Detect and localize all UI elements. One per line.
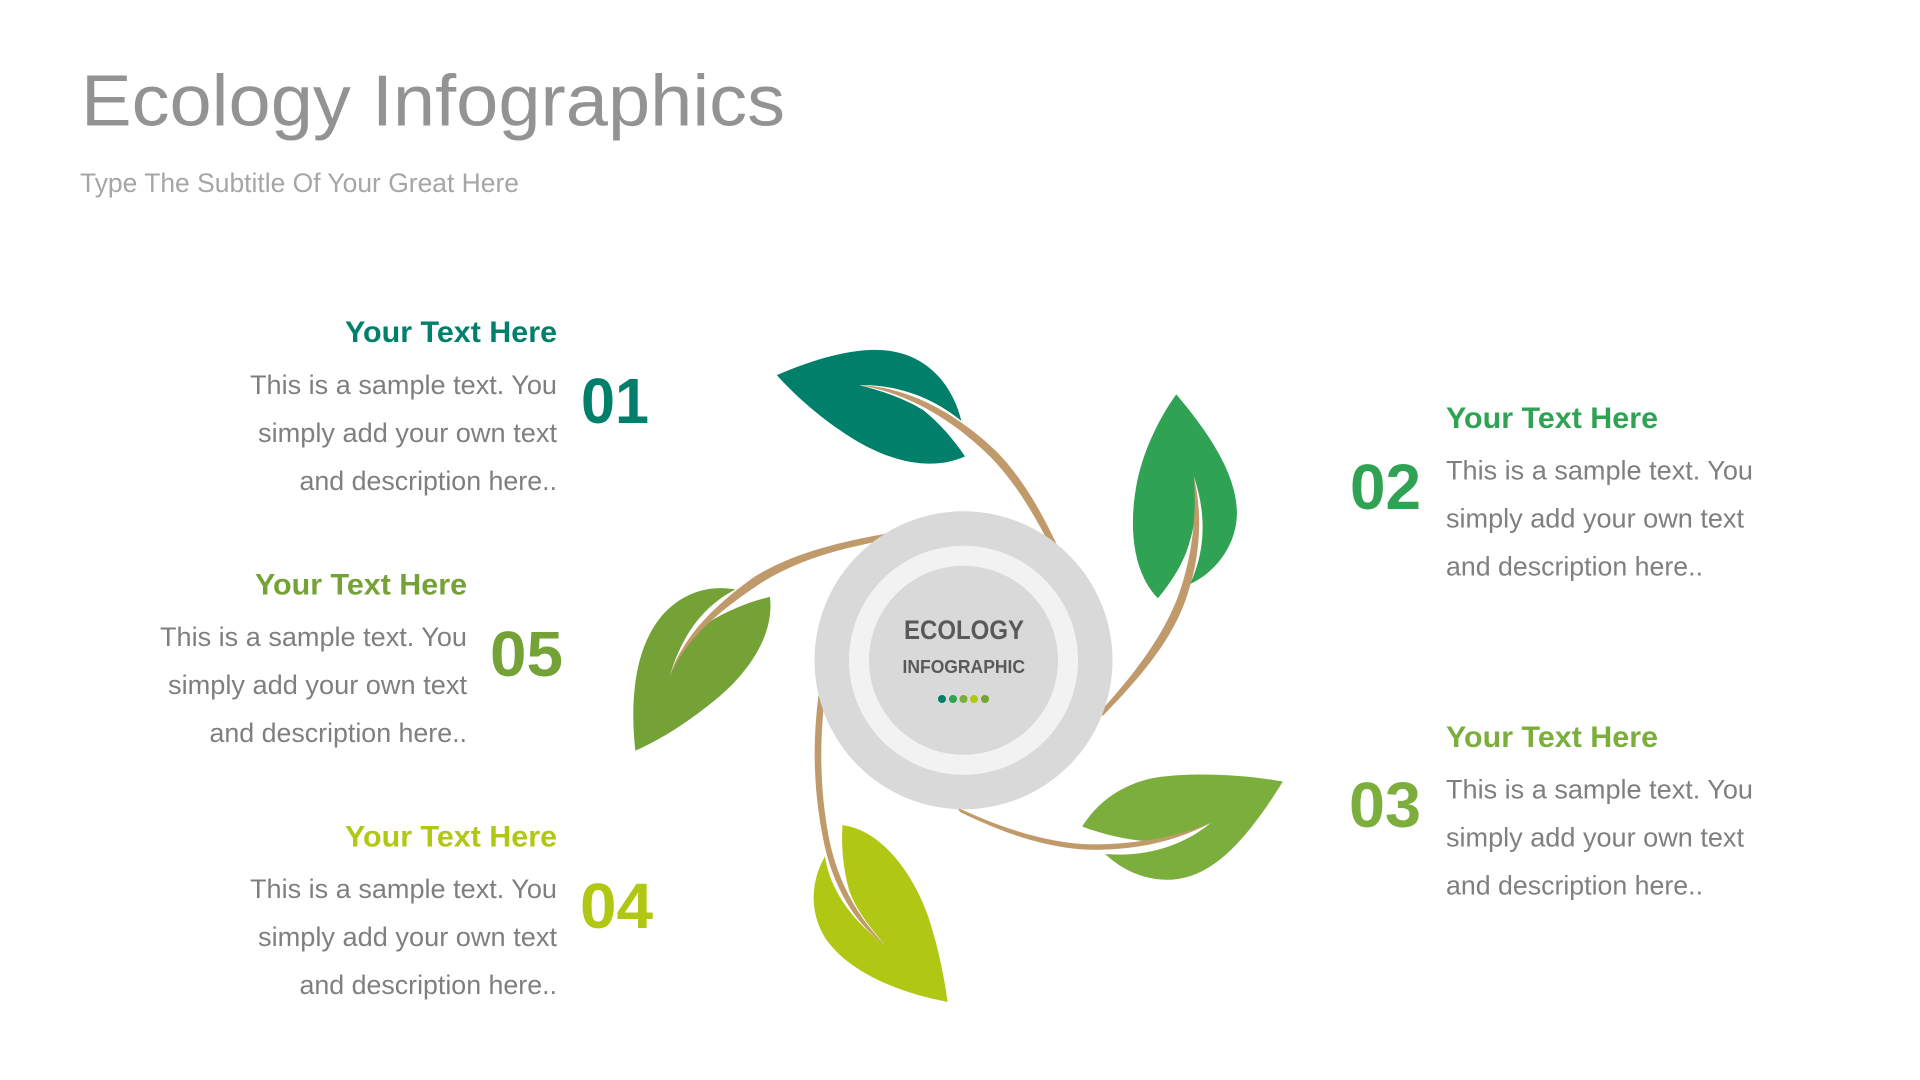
text block 02: This is a sample text. You — [1446, 456, 1753, 486]
text block 01: Your Text Here — [345, 316, 557, 349]
number 02: 02 — [1350, 451, 1421, 523]
leaf 02 — [1133, 394, 1237, 598]
number 03: 03 — [1349, 769, 1421, 841]
text block 03: This is a sample text. You — [1446, 774, 1753, 804]
stem 04 — [815, 694, 885, 945]
text block 03: simply add your own text — [1446, 822, 1744, 852]
stem 05 — [670, 532, 894, 676]
stem 03 — [956, 807, 1211, 850]
color dots — [938, 695, 989, 703]
text block 01 — [250, 316, 557, 496]
badge subtitle: INFOGRAPHIC — [902, 657, 1025, 677]
stem 02 — [1099, 476, 1199, 716]
text block 01: and description here.. — [300, 466, 557, 496]
text block 04: and description here.. — [300, 970, 557, 1000]
text block 01: This is a sample text. You — [250, 370, 557, 400]
text block 05: simply add your own text — [168, 670, 467, 700]
text block 03: Your Text Here — [1446, 721, 1658, 754]
badge title: ECOLOGY — [904, 615, 1024, 645]
text block 05: and description here.. — [210, 718, 467, 748]
text block 04: simply add your own text — [258, 922, 557, 952]
leaf 01 — [777, 350, 965, 464]
text block 02 — [1446, 402, 1753, 582]
leaf 03 — [1082, 775, 1283, 880]
text block 02: and description here.. — [1446, 552, 1703, 582]
leaf 04 — [814, 825, 948, 1002]
text block 04: Your Text Here — [345, 820, 557, 854]
text block 04: This is a sample text. You — [250, 874, 557, 904]
number 01: 01 — [581, 365, 649, 437]
text block 01: simply add your own text — [258, 418, 557, 448]
text block 03 — [1446, 721, 1753, 900]
number 04: 04 — [580, 870, 653, 942]
center badge — [814, 511, 1112, 809]
text block 05: Your Text Here — [255, 568, 467, 602]
text block 05: This is a sample text. You — [160, 622, 467, 652]
stem 01 — [859, 385, 1059, 552]
leaf diagram — [633, 350, 1283, 1002]
text block 02: Your Text Here — [1446, 402, 1658, 435]
text block 05 — [160, 568, 467, 748]
number 05: 05 — [490, 618, 563, 690]
text block 02: simply add your own text — [1446, 504, 1744, 534]
leaf 05 — [633, 588, 770, 751]
text block 03: and description here.. — [1446, 870, 1703, 900]
subtitle: Type The Subtitle Of Your Great Here — [80, 168, 519, 198]
title: Ecology Infographics — [81, 62, 785, 142]
text block 04 — [250, 820, 557, 1000]
